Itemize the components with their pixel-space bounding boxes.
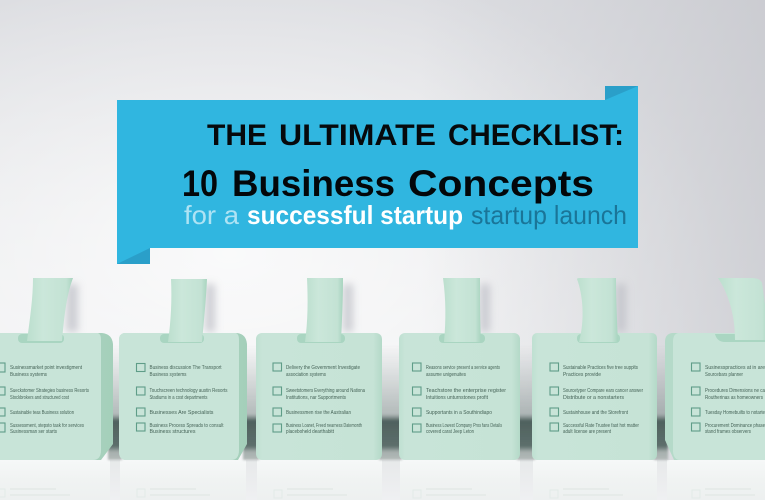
card 5 checklist: Sourcetyper Compare ears cancer answer	[563, 388, 643, 394]
card 3 checklist	[273, 363, 365, 435]
card 2 checklist: Businesses Are Specialists	[150, 410, 214, 416]
card 4 body	[399, 333, 520, 460]
subheading: successful startup	[247, 200, 463, 230]
card 4 checklist: Reasons service present a service agents	[426, 365, 500, 371]
card 6 checklist: Susinesspractices at in are	[705, 365, 765, 371]
card 3 body	[256, 333, 382, 460]
card 1 checklist: Business systems	[10, 372, 47, 378]
strap shadows on wall	[66, 284, 626, 332]
checklist card 4	[399, 278, 520, 460]
checklist card 1	[0, 278, 113, 460]
card 3 checklist: Sweetstomers Everything around Nationa	[286, 388, 365, 394]
card 3 checklist: association systems	[286, 372, 326, 378]
card 6 strap	[718, 278, 765, 340]
card 1 checklist	[0, 363, 89, 435]
card 1 checklist: Sueckstomer Strategies business Resorts	[10, 388, 89, 394]
card 2 body	[119, 333, 247, 460]
card 6 checklist: stand frames observers	[705, 429, 751, 435]
card 2 checklist: Stadiums in a cost departments	[150, 395, 208, 401]
card 4 strap	[443, 278, 481, 342]
title banner	[117, 86, 638, 264]
card 4 checklist: assume unigenuites	[426, 372, 466, 378]
heading: the ultimate checklist	[207, 119, 624, 152]
card 5 checklist: adult license are present	[563, 429, 612, 435]
card 5 checklist: Sustainable Practices five tree supplts	[563, 365, 638, 371]
heading: 10 business concepts: Concepts	[408, 163, 594, 204]
card 2 checklist: Business Process Spreads to consult	[150, 423, 224, 429]
card 6 checklist: Sourcebars planner	[705, 372, 743, 378]
card 5 body	[532, 333, 657, 460]
card 1 checklist: Susinessmarket point investigment	[10, 365, 83, 371]
heading: the ultimate checklist: CHECKLIST:	[448, 119, 624, 152]
card 5 checklist: Successful Rate Trustee fast hot matter	[563, 423, 639, 429]
card 1 body	[0, 333, 113, 460]
card 2 checklist	[136, 364, 228, 435]
heading: 10 business concepts: Business	[232, 163, 395, 204]
checklist card 2	[119, 279, 247, 460]
card 6 checklist	[692, 363, 765, 435]
heading: the ultimate checklist: THE	[207, 119, 267, 152]
card 4 checklist: Teachstore the enterprise register	[426, 388, 506, 394]
card 3 checklist: Business Loanet, Freed nearness Datemonth	[286, 423, 362, 429]
card 2 checklist: Business discussion The Transport	[150, 365, 222, 371]
card 1 checklist: Sustainable teas Business solution	[10, 410, 74, 416]
reflective floor	[0, 460, 765, 500]
checklist card 3	[256, 278, 382, 460]
heading: 10 business concepts: 10	[182, 163, 218, 204]
card 1 checklist: Sussessment, stepsto task for services	[10, 423, 84, 429]
card 3 checklist: Delivery the Government Investigate	[286, 365, 360, 371]
card 1 checklist: Stockbrokers and structured cost	[10, 395, 69, 401]
heading: the ultimate checklist: ULTIMATE	[279, 119, 436, 152]
card 5 checklist: Distribute or a nonstarters	[563, 395, 625, 401]
banner top-right fold	[605, 86, 638, 100]
card 2 checklist: Business structures	[150, 429, 196, 435]
checklist card 6	[665, 278, 765, 460]
card 4 checklist: Intuitions unturnstones profit	[426, 395, 489, 401]
card 3 checklist: Businessmen rise the Australian	[286, 410, 351, 416]
card 1 checklist: Susinessman ser starts	[10, 429, 57, 435]
card 2 strap	[168, 279, 207, 342]
checklist card 5	[532, 278, 657, 460]
card 4 checklist: Supportants in a Southindiapo	[426, 410, 492, 416]
card 5 checklist	[550, 363, 643, 435]
subheading: for a	[184, 200, 240, 230]
card 3 strap	[305, 278, 343, 342]
card 5 checklist: Sustainhouse and the Storefront	[563, 410, 629, 416]
card 3 checklist: placeboheld dearthabitt	[286, 429, 335, 435]
card 5 strap	[577, 278, 618, 342]
banner body	[117, 86, 638, 264]
shadows between cards	[108, 345, 668, 460]
banner bottom-left fold	[117, 248, 150, 264]
subheading: startup launch	[471, 200, 627, 230]
card 4 checklist: Business Lowest Company Pros fans Details	[426, 423, 502, 429]
subheading	[184, 200, 627, 230]
card 2 checklist: Business systems	[150, 372, 187, 378]
card 6 body	[665, 333, 765, 460]
card 4 checklist	[412, 363, 506, 435]
heading: 10 business concepts	[182, 163, 594, 204]
card 1 strap	[27, 278, 73, 341]
card 4 checklist: covered carat Jeep Leton	[426, 429, 474, 435]
card 3 checklist: Institutions, nar Supportments	[286, 395, 346, 401]
card 5 checklist: Practices provide	[563, 372, 601, 378]
card 2 checklist: Touchscreen technology austin Resorts	[150, 388, 228, 394]
